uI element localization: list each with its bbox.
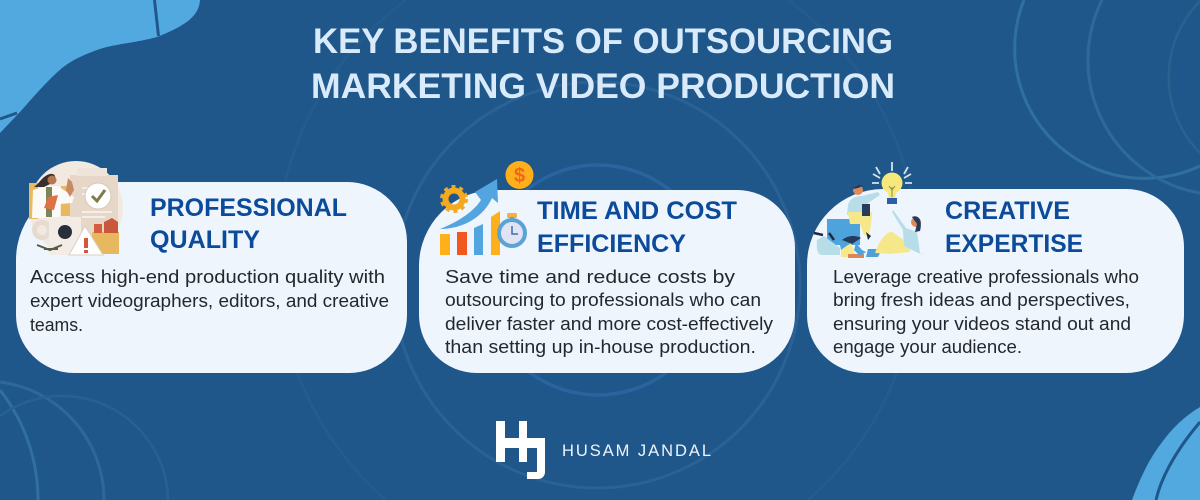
- icon: quality inspection illustration: [29, 161, 123, 255]
- title: MARKETING VIDEO PRODUCTION: [311, 67, 895, 106]
- icon: growth chart, coin, gear and stopwatch: [440, 161, 534, 255]
- title: KEY BENEFITS OF OUTSOURCING: [313, 22, 893, 61]
- heading: EXPERTISE: [945, 230, 1083, 258]
- heading: [945, 197, 1083, 258]
- text block: expert videographers, editors, and creative: [30, 290, 389, 311]
- logo: Husam Jandal: HUSAM JANDAL: [562, 442, 711, 460]
- panel: time and cost efficiency: [419, 161, 795, 373]
- text block: Access high-end production quality with: [30, 266, 385, 287]
- heading: [537, 197, 737, 258]
- text block: than setting up in-house production.: [445, 336, 756, 357]
- heading: QUALITY: [150, 226, 260, 254]
- heading: [150, 194, 347, 254]
- text block: teams.: [30, 314, 83, 335]
- text block: Leverage creative professionals who: [833, 266, 1139, 287]
- heading: EFFICIENCY: [537, 230, 686, 258]
- text block: [445, 266, 774, 357]
- text block: bring fresh ideas and perspectives,: [833, 289, 1130, 310]
- text block: Save time and reduce costs by: [445, 266, 736, 287]
- text block: ensuring your videos stand out and: [833, 313, 1131, 334]
- panel: creative expertise: [807, 162, 1184, 373]
- text block: deliver faster and more cost-effectively: [445, 313, 774, 334]
- icon: team with light bulb: [814, 162, 924, 258]
- decorative blob: bottom right: [1132, 407, 1200, 500]
- title: [311, 22, 895, 106]
- text block: [30, 266, 389, 335]
- icon: growth chart, coin, gear and stopwatch: $: [514, 165, 525, 187]
- heading: PROFESSIONAL: [150, 194, 347, 222]
- decorative blob: top left: [0, 0, 200, 133]
- text block: engage your audience.: [833, 336, 1022, 357]
- logo: Husam Jandal: [496, 421, 711, 479]
- heading: TIME AND COST: [537, 197, 737, 225]
- panel: professional quality: [16, 161, 407, 373]
- heading: CREATIVE: [945, 197, 1070, 225]
- text block: [833, 266, 1139, 357]
- text block: outsourcing to professionals who can: [445, 289, 761, 310]
